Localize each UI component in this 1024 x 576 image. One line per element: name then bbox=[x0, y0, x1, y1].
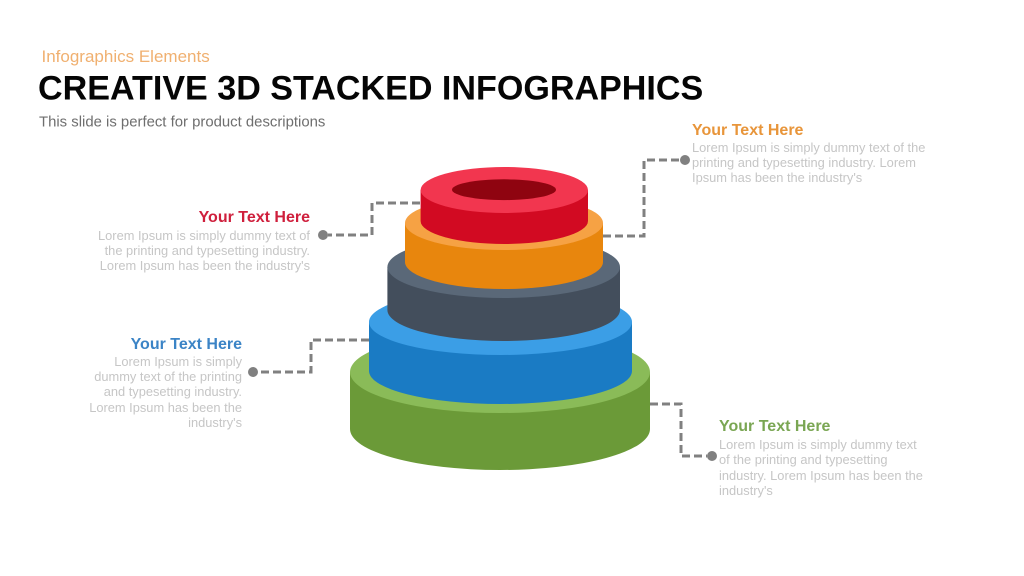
connector: orange tier bbox=[603, 155, 690, 236]
text block: orange: printing and typesetting industry. Lorem bbox=[692, 155, 916, 170]
text block: red bbox=[98, 209, 310, 273]
title: CREATIVE 3D STACKED INFOGRAPHICS bbox=[38, 70, 703, 108]
connector: green tier bbox=[650, 404, 717, 461]
text block: green: of the printing and typesetting bbox=[719, 452, 888, 467]
text block: orange bbox=[692, 122, 925, 185]
text block: orange: Ipsum has been the industry's bbox=[692, 170, 862, 185]
eyebrow heading: Infographics Elements bbox=[42, 47, 210, 66]
text block: orange: Lorem Ipsum is simply dummy text of the bbox=[692, 140, 925, 155]
text block: blue: dummy text of the printing bbox=[94, 369, 242, 384]
text block: blue: and typesetting industry. bbox=[104, 384, 242, 399]
text block: blue: Lorem Ipsum has been the bbox=[89, 400, 242, 415]
text block: blue: Lorem Ipsum is simply bbox=[114, 354, 243, 369]
text block: green: Your Text Here bbox=[719, 418, 831, 435]
3D stacked chart bbox=[350, 167, 650, 470]
tier: orange bbox=[405, 196, 603, 289]
text block: red: Lorem Ipsum is simply dummy text of bbox=[98, 228, 310, 243]
text block: blue bbox=[89, 336, 243, 430]
text block: orange: Your Text Here bbox=[692, 122, 804, 139]
text block: green: Lorem Ipsum is simply dummy text bbox=[719, 437, 917, 452]
text block: green: industry's bbox=[719, 483, 773, 498]
connector: red tier bbox=[318, 203, 420, 240]
text block: red: the printing and typesetting industry. bbox=[105, 243, 310, 258]
text block: blue: Your Text Here bbox=[131, 336, 242, 353]
text block: blue: industry's bbox=[188, 415, 242, 430]
text block: green bbox=[719, 418, 923, 498]
connector: blue tier bbox=[248, 340, 369, 377]
tier: red top ring bbox=[421, 167, 588, 244]
subtitle: This slide is perfect for product descriptions bbox=[39, 114, 325, 130]
text block: green: industry. Lorem Ipsum has been the bbox=[719, 468, 923, 483]
tier: green base bbox=[350, 331, 650, 470]
tier: dark grey bbox=[387, 236, 620, 341]
text block: red: Your Text Here bbox=[199, 209, 310, 226]
tier: blue bbox=[369, 289, 632, 404]
text block: red: Lorem Ipsum has been the industry's bbox=[100, 258, 310, 273]
